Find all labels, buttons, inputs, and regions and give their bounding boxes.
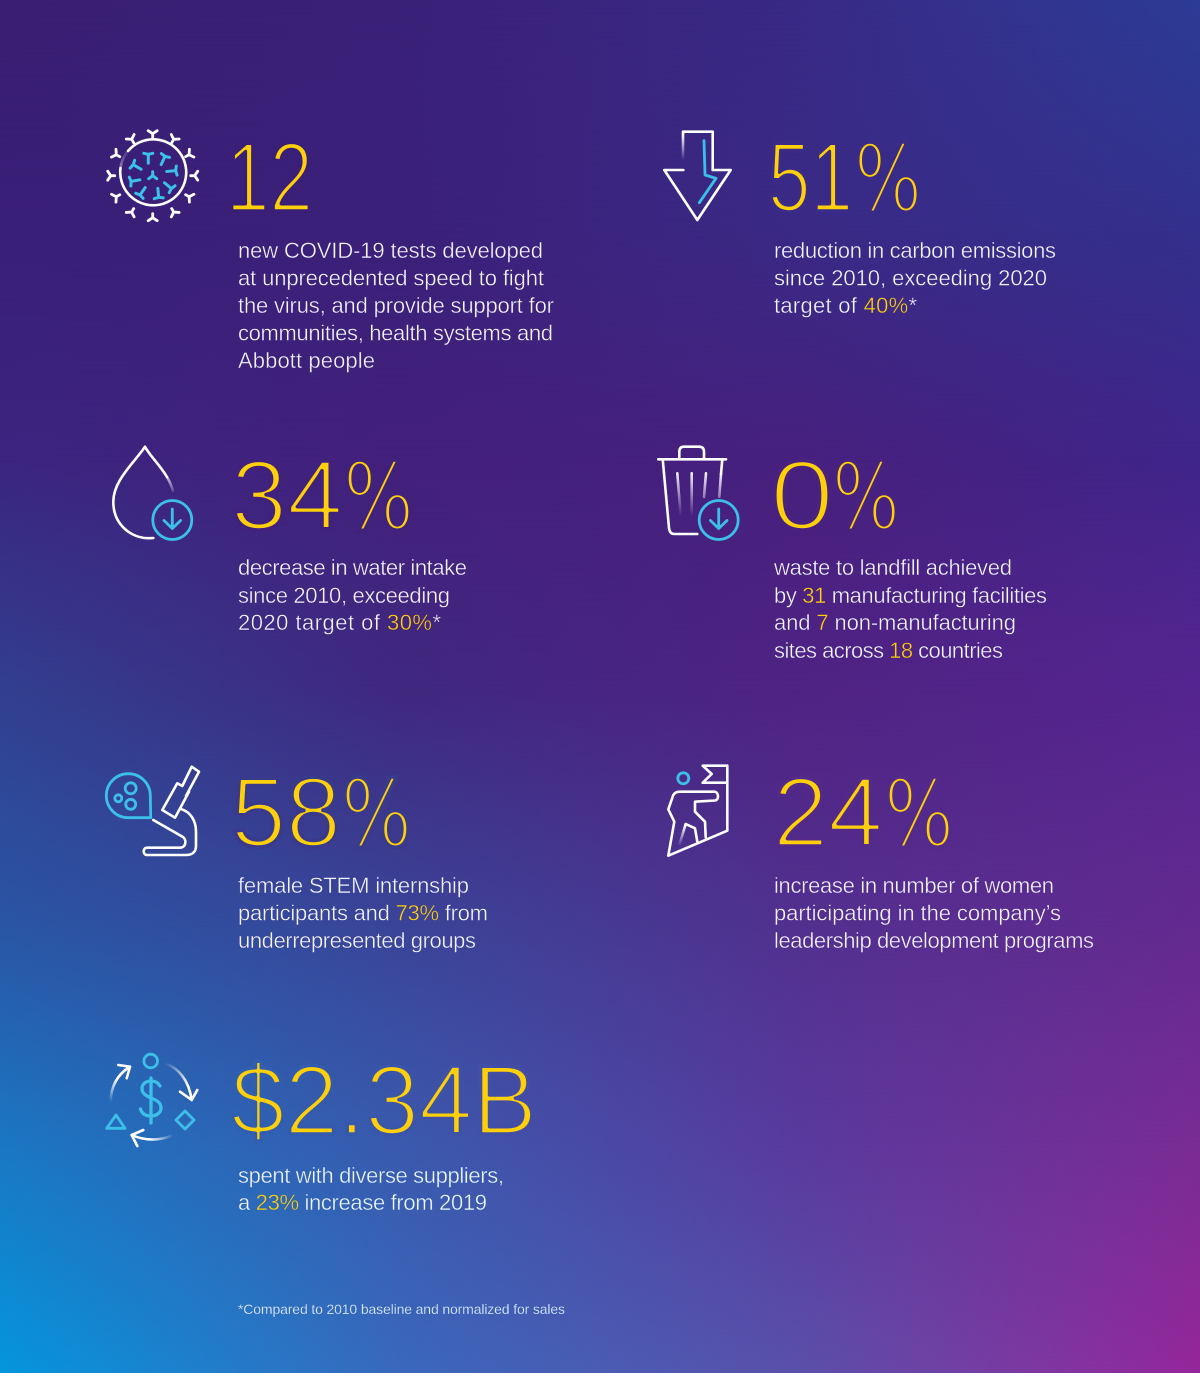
- description: waste to landfill: and 7 non-manufacturing: [774, 610, 1016, 635]
- description: diverse suppliers: [238, 1163, 504, 1215]
- stat: 12 COVID-19 tests: [108, 122, 554, 373]
- description: STEM interns: underrepresented groups: [238, 928, 476, 953]
- description: water intake: [238, 555, 467, 635]
- number: 58%: [231, 757, 412, 869]
- stat: 0% waste to landfill: [658, 440, 1047, 663]
- number: 34%: %: [343, 443, 414, 552]
- description: STEM interns: female STEM internship: [238, 873, 469, 898]
- icon: arrow with lightning bolt: [664, 132, 731, 220]
- stat: $2.34B diverse suppliers: [107, 1045, 537, 1215]
- description: waste to landfill: [773, 555, 1047, 663]
- number: 51%: 51: [768, 122, 853, 232]
- stat: 58% female STEM interns: [106, 757, 488, 953]
- number: 24%: %: [884, 760, 954, 869]
- number: 34%: [231, 440, 414, 552]
- description: women in leadership: leadership development programs: [774, 928, 1094, 953]
- icon: water drop with down arrow: [113, 447, 192, 540]
- description: STEM interns: participants and 73% from: [238, 900, 488, 926]
- description: water intake: since 2010, exceeding: [238, 583, 450, 608]
- icon: virus: [108, 131, 198, 221]
- description: COVID-19 tests: [238, 238, 554, 373]
- description: carbon reduction: [774, 238, 1056, 318]
- number: 34%: 34: [231, 440, 343, 550]
- number: 51%: [768, 122, 922, 234]
- stat: 24% women in leadership: [668, 757, 1094, 953]
- description: COVID-19 tests: Abbott people: [238, 348, 375, 373]
- number: 0%: 0: [770, 440, 834, 550]
- description: water intake: decrease in water intake: [238, 555, 467, 580]
- number: 58%: 58: [231, 757, 341, 867]
- icon: trash can with down arrow: [658, 447, 738, 540]
- description: COVID-19 tests: communities, health systems and: [238, 320, 553, 346]
- stat: 51% carbon reduction: [664, 122, 1056, 318]
- number: 12: 12: [226, 122, 313, 232]
- description: women in leadership: participating in the company’s: [774, 900, 1061, 926]
- description: carbon reduction: since 2010, exceeding 2020: [774, 266, 1047, 290]
- number: 24%: 24: [773, 757, 883, 867]
- number: 58%: %: [341, 760, 412, 869]
- number: 0%: [770, 440, 900, 552]
- description: diverse suppliers: spent with diverse suppliers,: [238, 1163, 504, 1188]
- description: COVID-19 tests: new COVID-19 tests developed: [238, 238, 543, 263]
- description: women in leadership: increase in number of women: [774, 873, 1054, 898]
- icon: circular supplier flow with dollar: [107, 1054, 197, 1146]
- number: 0%: %: [832, 443, 900, 552]
- number: 24%: [773, 757, 954, 869]
- description: STEM interns: [238, 873, 488, 953]
- number: 51%: %: [854, 125, 922, 234]
- number: $2.34B: $2.34B: [231, 1045, 537, 1155]
- description: waste to landfill: by 31 manufacturing facilities: [774, 583, 1047, 608]
- description: women in leadership: [774, 873, 1094, 953]
- description: water intake: 2020 target of 30%*: [238, 610, 441, 635]
- stat: 34% water intake: [113, 440, 467, 635]
- description: carbon reduction: reduction in carbon emissions: [774, 238, 1056, 263]
- icon: microscope with cell: [106, 767, 199, 855]
- description: waste to landfill: waste to landfill achieved: [773, 555, 1012, 580]
- icon: climber with flag: [668, 766, 727, 856]
- description: COVID-19 tests: the virus, and provide support for: [238, 293, 554, 318]
- description: COVID-19 tests: at unprecedented speed to fight: [238, 266, 544, 290]
- description: carbon reduction: target of 40%*: [774, 293, 917, 318]
- description: waste to landfill: sites across 18 countries: [774, 638, 1003, 663]
- footnote: *Compared to 2010 baseline and normalized for sales: [238, 1301, 565, 1317]
- description: diverse suppliers: a 23% increase from 2019: [238, 1190, 487, 1215]
